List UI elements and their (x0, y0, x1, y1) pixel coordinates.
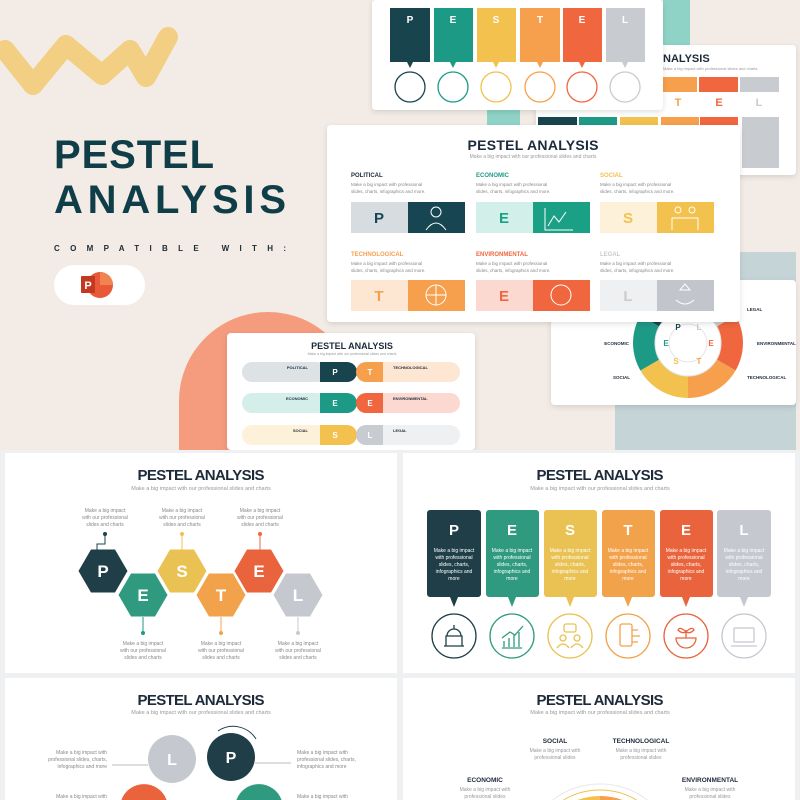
panel: column boxes: with professional (609, 555, 647, 561)
panel: column boxes: Make a big impact (492, 548, 533, 554)
panel: circles layout: infographics and more (297, 764, 347, 770)
panel: column boxes: slides, charts, (613, 562, 643, 568)
panel: column boxes: slides, charts, (555, 562, 585, 568)
wheel labels: SOCIAL (613, 375, 630, 380)
right background card (536, 45, 796, 175)
panel: column boxes: with professional (493, 555, 531, 561)
gray-blue block (615, 252, 796, 450)
panel: circles layout: P (226, 750, 237, 767)
wheel: P (675, 323, 681, 332)
main card boxes: L (623, 288, 633, 305)
panel: column boxes: infographics and (552, 569, 589, 575)
main card labels: SOCIAL (600, 173, 623, 179)
bottom hero slide card: S (332, 431, 338, 440)
hexagon captions (82, 508, 321, 661)
panel: hexagon layout (5, 453, 397, 673)
wheel labels: ENVIRONMENTAL (757, 341, 796, 346)
main card boxes: E (499, 288, 509, 305)
panel: column boxes: infographics and (610, 569, 647, 575)
panel: column boxes: slides, charts, (729, 562, 759, 568)
panel: column boxes: slides, charts, (671, 562, 701, 568)
bottom panels background (0, 450, 800, 800)
wheel labels: TECHNOLOGICAL (747, 375, 786, 380)
panel: circles layout: professional slides, charts, (297, 757, 356, 763)
panel: column boxes: slides, charts, (439, 562, 469, 568)
bottom hero slide card: L (368, 431, 373, 440)
panel: column boxes: more (564, 576, 576, 582)
decorative zigzag (5, 37, 168, 85)
hero title: ANALYSIS (54, 178, 286, 222)
hexagon captions: with our professional (275, 648, 321, 654)
wheel: S (673, 357, 679, 366)
top card PESTEL boxes: S (493, 15, 500, 26)
main hero card: slides, charts, infographics and more. (476, 268, 551, 273)
top card PESTEL boxes (390, 8, 645, 68)
hexagon captions: slides and charts (241, 522, 279, 528)
main card boxes: S (623, 210, 633, 227)
hero title (54, 133, 286, 222)
panel: column boxes: infographics and (494, 569, 531, 575)
panel: semicircle layout: ENVIRONMENTAL (682, 777, 738, 784)
panel: semicircle layout: professional slides (534, 755, 576, 761)
hexagons: E (253, 562, 265, 581)
wheel labels (604, 307, 796, 380)
main card labels: ENVIRONMENTAL (476, 252, 528, 258)
panel: circles layout: L (167, 752, 177, 769)
teal shapes behind cards (487, 0, 690, 125)
hexagon captions: with our professional (159, 515, 205, 521)
panel: column boxes: infographics and (668, 569, 705, 575)
panel: semicircle layout: SOCIAL (543, 738, 567, 745)
panel: semicircle layout: Make a big impact with (685, 787, 736, 793)
main hero card: Make a big impact with professional (600, 182, 671, 187)
top card PESTEL boxes: P (407, 15, 414, 26)
hexagons: P (97, 562, 109, 581)
hexagon captions: Make a big impact (123, 641, 164, 647)
panel: column boxes (403, 453, 795, 673)
panel: column boxes: E (507, 522, 517, 539)
panel: column boxes: P (449, 522, 459, 539)
panel: circles layout: Make a big impact with (297, 794, 348, 800)
wheel: T (697, 357, 702, 366)
bottom hero slide card: Make a big impact with our professional slides and charts (308, 352, 397, 356)
panel: semicircle layout: TECHNOLOGICAL (613, 738, 669, 745)
panel: semicircle layout: professional slides (464, 794, 506, 800)
right background card: Make a big impact with professional slides and charts (663, 66, 758, 71)
hexagons: E (137, 586, 149, 605)
hexagons (78, 550, 322, 616)
hexagon captions: slides and charts (86, 522, 124, 528)
row pills: POLITICAL (287, 365, 309, 370)
panel: column boxes: PESTEL ANALYSIS (536, 467, 664, 484)
main card boxes: E (499, 210, 509, 227)
compatible with label: COMPATIBLE WITH: (54, 244, 286, 253)
hexagon captions: slides and charts (124, 655, 162, 661)
hexagons: S (176, 562, 188, 581)
panel: semicircle layout: Make a big impact with (460, 787, 511, 793)
panel: column boxes: Make a big impact (608, 548, 649, 554)
panel: semicircle layout: Make a big impact with (530, 748, 581, 754)
row pills: ENVIRONMENTAL (393, 396, 428, 401)
wheel labels: ECONOMIC (604, 341, 630, 346)
bottom hero slide card: E (332, 399, 338, 408)
top card PESTEL boxes: T (537, 15, 543, 26)
main card labels (351, 173, 623, 258)
powerpoint badge: P (84, 280, 92, 292)
bottom hero slide card: P (332, 368, 338, 377)
main card labels: LEGAL (600, 252, 621, 258)
connectors (97, 532, 300, 635)
main card boxes (351, 202, 714, 311)
bottom hero slide card: E (367, 399, 373, 408)
row pills: SOCIAL (293, 428, 309, 433)
bottom hero slide card: T (368, 368, 373, 377)
main hero card: slides, charts, infographics and more. (600, 268, 675, 273)
bottom hero slide card: PESTEL ANALYSIS (311, 341, 393, 351)
main hero card: Make a big impact with professional (600, 261, 671, 266)
top card PESTEL boxes: E (579, 15, 586, 26)
hexagon captions: with our professional (198, 648, 244, 654)
bottom hero slide card (227, 333, 475, 450)
wheel: L (697, 323, 702, 332)
panel: circles layout: Make a big impact with (56, 750, 107, 756)
panel: circles layout (5, 678, 397, 800)
right background card: L (756, 97, 763, 109)
panel: column boxes: with professional (725, 555, 763, 561)
panel: column boxes: with professional (667, 555, 705, 561)
panel: semicircle layout: professional slides (620, 755, 662, 761)
main card labels: ECONOMIC (476, 173, 510, 179)
panel: column boxes: infographics and (726, 569, 763, 575)
row pills (242, 362, 460, 445)
panel: circles layout: infographics and more (58, 764, 107, 770)
hexagon captions: slides and charts (279, 655, 317, 661)
panel: column boxes: S (565, 522, 575, 539)
panel: column boxes: more (622, 576, 634, 582)
panel: column boxes: more (506, 576, 518, 582)
panel: column boxes: more (680, 576, 692, 582)
hexagon captions: Make a big impact (240, 508, 281, 514)
row pills: LEGAL (393, 428, 407, 433)
main hero card: slides, charts, infographics and more. (476, 189, 551, 194)
top card PESTEL boxes: L (622, 15, 628, 26)
main card boxes: P (374, 210, 384, 227)
hero title: PESTEL (54, 133, 214, 177)
panel: column boxes: T (623, 522, 633, 539)
row pills: TECHNOLOGICAL (393, 365, 428, 370)
main card labels: POLITICAL (351, 173, 383, 179)
panel: circles layout: professional slides, charts, (48, 757, 107, 763)
panel: column boxes: L (739, 522, 749, 539)
panel: column boxes: Make a big impact (550, 548, 591, 554)
hero background (0, 0, 800, 450)
panel: semicircle layout: professional slides (689, 794, 731, 800)
panel: circles layout: PESTEL ANALYSIS (138, 692, 264, 709)
hexagons: T (216, 586, 227, 605)
panel: column boxes: Make a big impact (724, 548, 765, 554)
row pills: ECONOMIC (286, 396, 308, 401)
panel: column boxes: more (738, 576, 750, 582)
panel: column boxes: with professional (551, 555, 589, 561)
main hero card: Make a big impact with professional (476, 182, 547, 187)
top card icons (395, 72, 640, 102)
panel: column boxes: Make a big impact with our professional slides and charts (530, 486, 670, 492)
hexagon captions: slides and charts (202, 655, 240, 661)
main hero card: slides, charts, infographics and more. (351, 268, 426, 273)
panel: column boxes: E (681, 522, 691, 539)
panel: column boxes: slides, charts, (497, 562, 527, 568)
wheel: E (663, 339, 669, 348)
panel: column boxes: Make a big impact (666, 548, 707, 554)
panel: semicircle layout (403, 678, 795, 800)
main hero card: Make a big impact with our professional slides and charts (470, 154, 597, 160)
right background card: NALYSIS (663, 53, 710, 65)
hexagons: L (293, 586, 303, 605)
right background card: E (715, 97, 723, 109)
hexagon captions: with our professional (82, 515, 128, 521)
top card PESTEL boxes: E (450, 15, 457, 26)
hexagon captions: Make a big impact (85, 508, 126, 514)
wheel: E (708, 339, 714, 348)
panel: semicircle layout: Make a big impact with our professional slides and charts (530, 710, 670, 716)
wheel (633, 288, 743, 398)
top slide card (372, 0, 663, 110)
panel: semicircle layout: ECONOMIC (467, 777, 503, 784)
hexagon captions: with our professional (120, 648, 166, 654)
wheel labels: LEGAL (747, 307, 763, 312)
salmon arch (179, 312, 357, 450)
main card boxes: T (374, 288, 384, 305)
main hero card (327, 125, 740, 322)
panel: circles layout: Make a big impact with our professional slides and charts (131, 710, 271, 716)
main hero card: Make a big impact with professional (351, 261, 422, 266)
hexagon captions: Make a big impact (162, 508, 203, 514)
main hero card: Make a big impact with professional (476, 261, 547, 266)
hexagon captions: Make a big impact (201, 641, 242, 647)
panel: column boxes: with professional (435, 555, 473, 561)
main hero card: slides, charts, infographics and more. (600, 189, 675, 194)
main card labels: TECHNOLOGICAL (351, 252, 404, 258)
panel: column boxes: infographics and (436, 569, 473, 575)
speech boxes (427, 510, 771, 607)
panel: circles layout: Make a big impact with (297, 750, 348, 756)
panel: hexagon layout: Make a big impact with our professional slides and charts (131, 486, 271, 492)
panel: semicircle layout: PESTEL ANALYSIS (536, 692, 664, 709)
hexagon captions: slides and charts (163, 522, 201, 528)
right background card: T (675, 97, 682, 109)
main hero card: PESTEL ANALYSIS (468, 137, 598, 153)
hexagon captions: with our professional (237, 515, 283, 521)
icon circles (432, 614, 766, 658)
panel: column boxes: more (448, 576, 460, 582)
panel: hexagon layout: PESTEL ANALYSIS (138, 467, 264, 484)
panel: circles layout: Make a big impact with (56, 794, 107, 800)
hexagon captions: Make a big impact (278, 641, 319, 647)
panel: semicircle layout: Make a big impact with (616, 748, 667, 754)
main hero card: Make a big impact with professional (351, 182, 422, 187)
panel: column boxes: Make a big impact (434, 548, 475, 554)
wheel card (551, 280, 796, 405)
main hero card: slides, charts, infographics and more. (351, 189, 426, 194)
powerpoint badge (54, 265, 145, 305)
